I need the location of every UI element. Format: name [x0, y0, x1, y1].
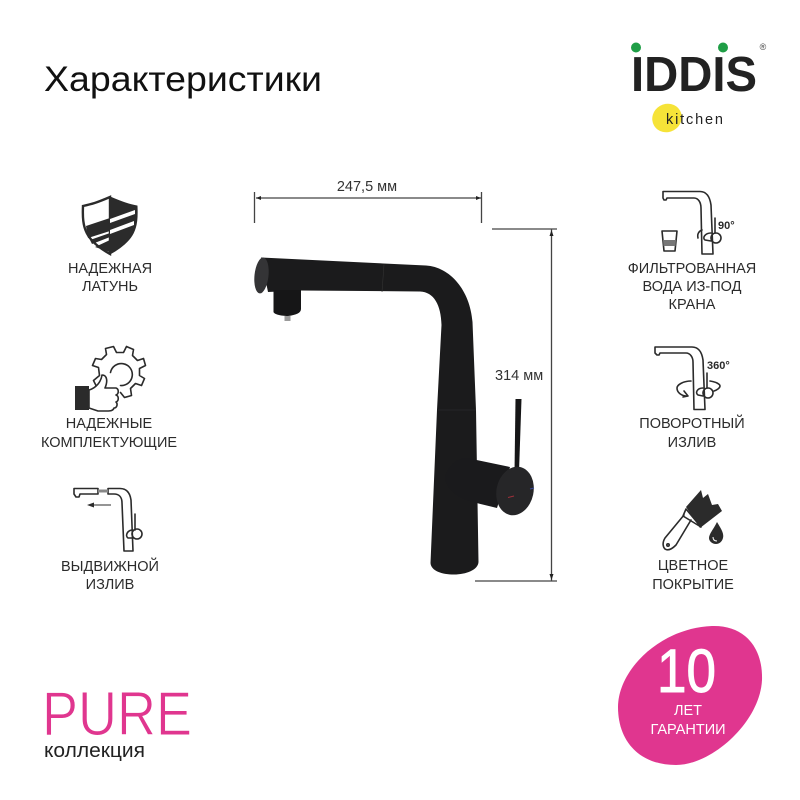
label: components: НАДЕЖНЫЕ: [66, 416, 153, 432]
feature: colour coating: [652, 490, 734, 593]
label: filtered water: КРАНА: [669, 297, 716, 313]
label: colour coating: ПОКРЫТИЕ: [652, 577, 734, 593]
label: colour coating: ЦВЕТНОЕ: [658, 558, 728, 574]
logo: iddis kitchen: kitchen: [666, 112, 723, 128]
icon: paint brush and drop: [663, 490, 723, 550]
label: filtered water: ВОДА ИЗ-ПОД: [643, 279, 742, 295]
feature: swivel spout: [639, 347, 745, 451]
icon: swivel faucet: 360°: [707, 360, 730, 372]
label: pull-out spout: ИЗЛИВ: [86, 577, 134, 593]
warranty badge: [618, 626, 762, 765]
logo: iddis kitchen: [631, 42, 767, 138]
label: filtered water: ФИЛЬТРОВАННАЯ: [628, 261, 756, 277]
feature: pull-out spout: [61, 488, 159, 593]
feature: brass: [68, 197, 152, 295]
logo: iddis kitchen: IDDIS: [631, 48, 757, 102]
feature: components: [41, 346, 177, 451]
title: Характеристики: [44, 60, 322, 99]
dimension: width: [254, 179, 482, 223]
label: components: КОМПЛЕКТУЮЩИЕ: [41, 435, 177, 451]
icon: shield: [83, 197, 137, 254]
collection name: коллекция: [44, 740, 145, 762]
label: swivel spout: ИЗЛИВ: [668, 435, 716, 451]
dimension: height: [475, 229, 557, 581]
dimension: height: 314 мм: [495, 368, 543, 384]
faucet: [253, 257, 538, 574]
warranty badge: ЛЕТ: [674, 703, 702, 719]
icon: gear and thumb: [75, 346, 146, 411]
dimension: width: 247,5 мм: [337, 179, 397, 195]
label: swivel spout: ПОВОРОТНЫЙ: [639, 414, 745, 432]
label: brass: НАДЕЖНАЯ: [68, 261, 152, 277]
warranty badge: 10: [657, 637, 716, 705]
icon: pull-out faucet: [74, 488, 142, 551]
feature: filtered water: [628, 192, 756, 313]
label: pull-out spout: ВЫДВИЖНОЙ: [61, 557, 159, 575]
logo: iddis kitchen: ®: [760, 42, 767, 52]
collection name: PURE: [42, 680, 192, 749]
icon: faucet with glass: 90°: [718, 220, 735, 232]
warranty badge: ГАРАНТИИ: [650, 722, 726, 738]
label: brass: ЛАТУНЬ: [82, 279, 138, 295]
